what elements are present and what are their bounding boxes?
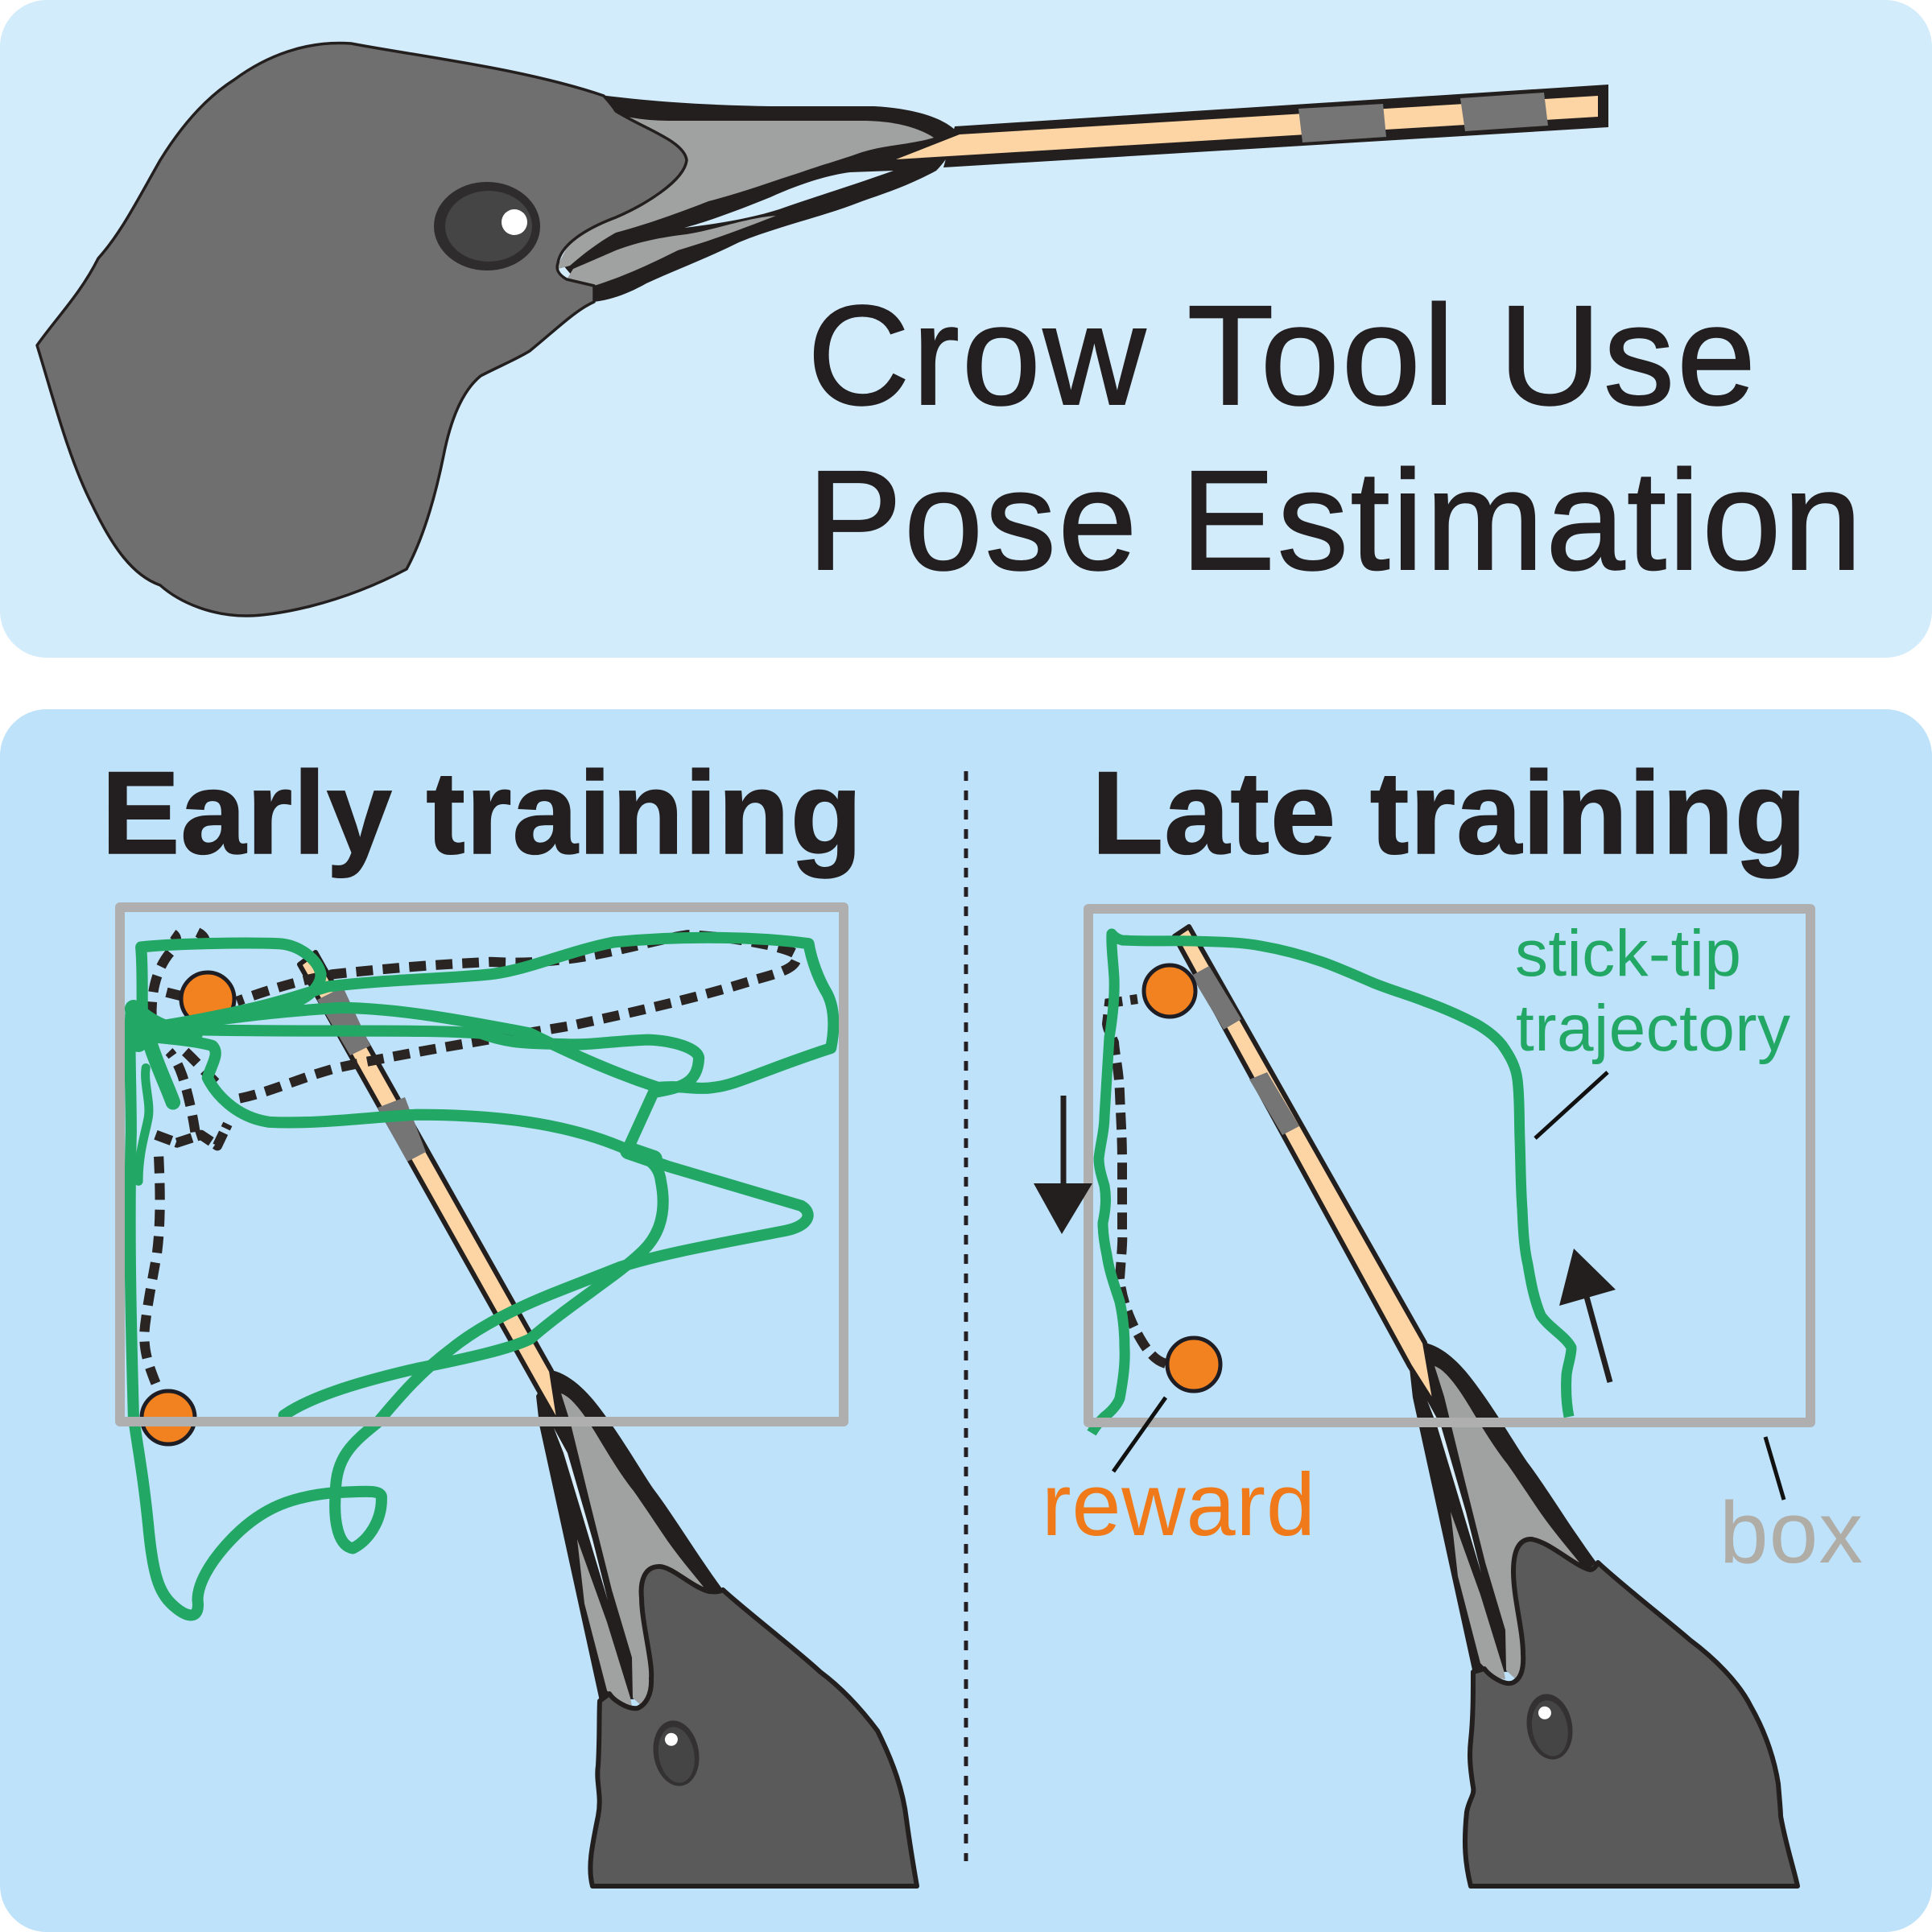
trajectory: late training, stick-tip path bbox=[1092, 934, 1571, 1433]
illustration: late training stick bbox=[1174, 927, 1436, 1408]
illustration: large crow head with stick bbox=[37, 43, 1608, 616]
illustration: early training crow bbox=[536, 1370, 917, 1886]
head bbox=[37, 43, 687, 616]
head bbox=[1465, 1539, 1798, 1886]
illustration: late training crow bbox=[1410, 1343, 1798, 1886]
reward: early training lower bbox=[142, 1391, 195, 1444]
arrow: downward bbox=[1034, 1096, 1092, 1234]
label: stick-tip trajectory bbox=[1515, 917, 1790, 1065]
label: box: box bbox=[1719, 1484, 1863, 1582]
title bbox=[807, 277, 1862, 600]
eye bbox=[648, 1717, 704, 1790]
trajectory: early training, reward path bbox=[144, 932, 797, 1383]
beak bbox=[1410, 1343, 1596, 1681]
label: stick-tip trajectory: trajectory bbox=[1516, 992, 1790, 1065]
head bbox=[590, 1567, 917, 1886]
label: stick-tip trajectory: stick-tip bbox=[1515, 917, 1741, 990]
arrow: upward bbox=[1559, 1249, 1616, 1382]
eye bbox=[434, 182, 540, 270]
panel: top background bbox=[0, 0, 1932, 658]
chart frame: early training box bbox=[120, 907, 844, 1422]
illustration: early training stick bbox=[299, 952, 560, 1428]
stick fill and bands bbox=[896, 93, 1598, 159]
heading: late training: Late training bbox=[1092, 747, 1806, 878]
beak bbox=[536, 1370, 723, 1708]
reward: late training lower bbox=[1167, 1338, 1220, 1391]
label: reward: reward bbox=[1042, 1455, 1315, 1554]
trajectory: late training, reward path bbox=[1107, 999, 1166, 1364]
heading: early training: Early training bbox=[101, 747, 862, 878]
trajectory: early training, stick-tip path bbox=[130, 938, 833, 1615]
reward: late training upper bbox=[1144, 965, 1195, 1017]
beak bbox=[555, 95, 958, 302]
panel: bottom background bbox=[0, 709, 1932, 1932]
chart frame: late training box bbox=[1088, 909, 1810, 1422]
eye bbox=[1521, 1690, 1578, 1763]
stick outline bbox=[943, 85, 1608, 167]
title: Pose Estimation bbox=[807, 442, 1862, 600]
reward: early training upper bbox=[181, 972, 234, 1026]
title: Crow Tool Use bbox=[807, 277, 1756, 435]
